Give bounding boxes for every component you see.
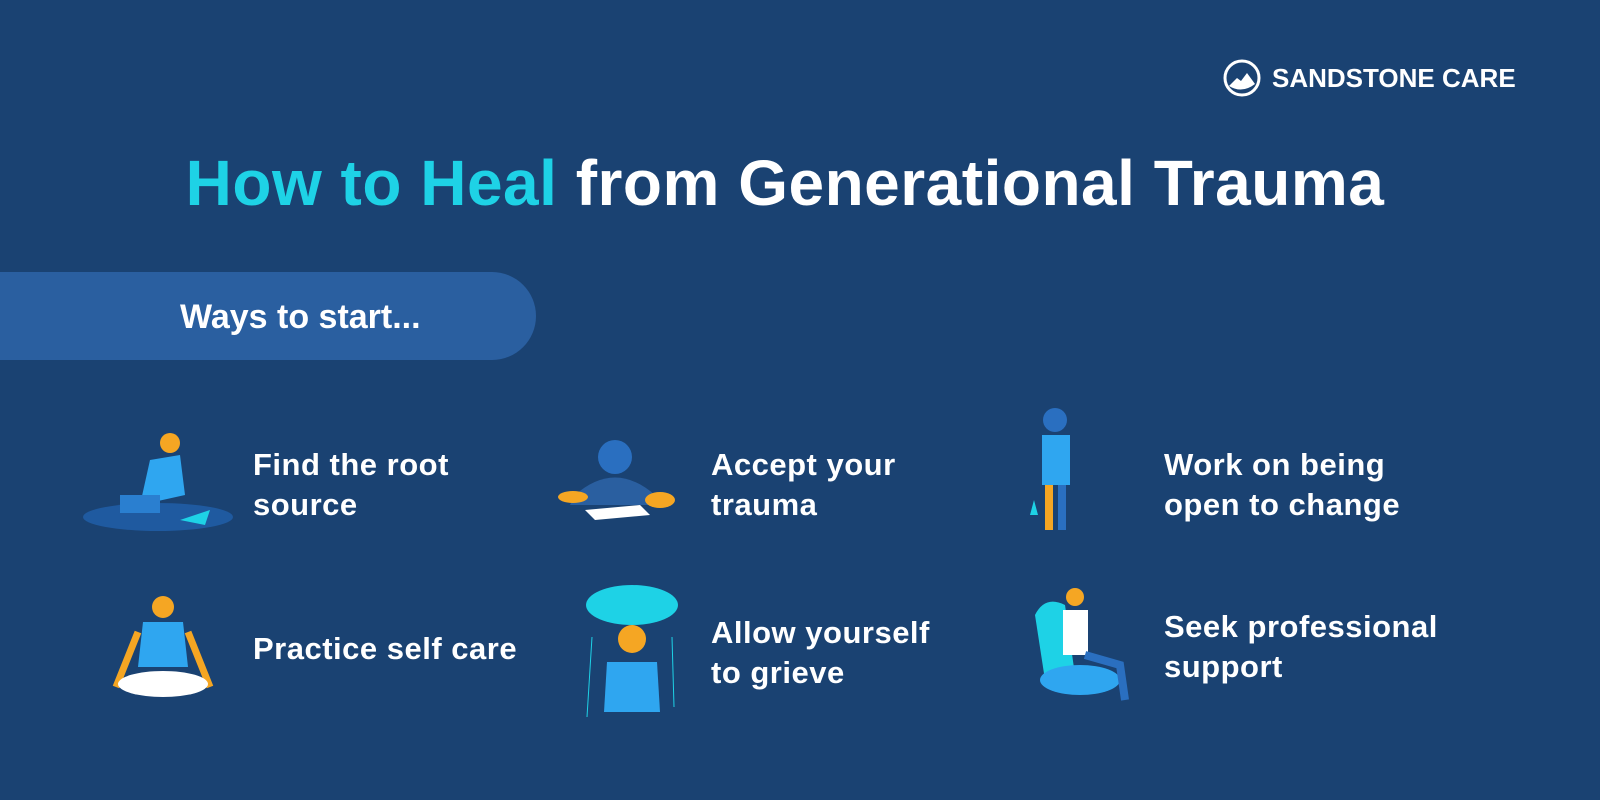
text: professional support: support bbox=[1164, 649, 1283, 684]
text: find root bbox=[253, 447, 449, 522]
text: grieve: Allow yourself bbox=[711, 615, 930, 650]
icon: accept bbox=[558, 440, 675, 520]
icon: find root bbox=[83, 433, 233, 531]
text: open to change bbox=[1164, 447, 1400, 522]
text: find root: source bbox=[253, 487, 358, 522]
text: self care: Practice self care bbox=[253, 631, 517, 666]
text: open to change: open to change bbox=[1164, 487, 1400, 522]
text: professional support bbox=[1164, 609, 1438, 684]
icon: self care bbox=[112, 596, 214, 697]
text: grieve bbox=[711, 615, 930, 690]
text: accept bbox=[711, 447, 896, 522]
icon: professional support bbox=[1035, 588, 1129, 701]
pill: ways to start bbox=[0, 272, 536, 360]
text: professional support: Seek professional bbox=[1164, 609, 1438, 644]
logo: SANDSTONE CARE bbox=[1272, 63, 1516, 93]
logo bbox=[1224, 60, 1516, 96]
text: grieve: to grieve bbox=[711, 655, 845, 690]
title: How to Heal from Generational Trauma bbox=[186, 147, 1384, 219]
text: accept: trauma bbox=[711, 487, 817, 522]
text: open to change: Work on being bbox=[1164, 447, 1385, 482]
icon: open to change bbox=[1030, 408, 1070, 530]
pill: ways to start: Ways to start... bbox=[180, 298, 421, 336]
icon: grieve bbox=[586, 585, 678, 717]
text: find root: Find the root bbox=[253, 447, 449, 482]
text: accept: Accept your bbox=[711, 447, 896, 482]
